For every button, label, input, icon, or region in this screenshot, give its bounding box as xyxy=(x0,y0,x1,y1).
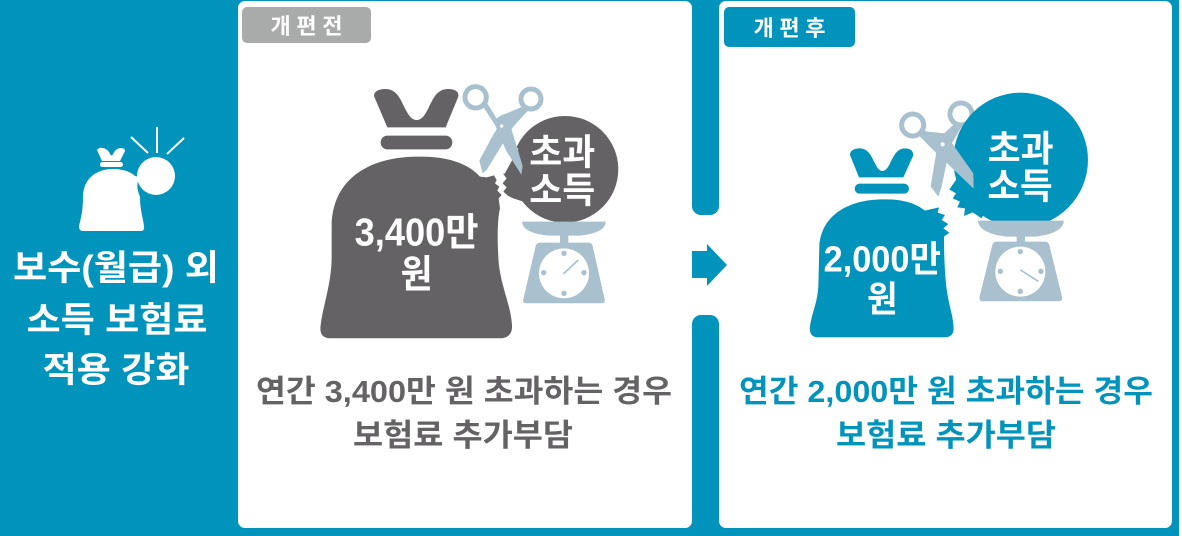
icon: scissors front blade xyxy=(483,103,523,175)
badge: after: 개 편 후 xyxy=(754,16,826,41)
text block: before description: 보험료 추가부담 xyxy=(353,418,573,453)
icon: scissors back blade and rings xyxy=(902,103,972,197)
panel: left sidebar xyxy=(13,127,219,390)
badge: before: 개 편 전 xyxy=(270,14,342,39)
text: excess income: 소득 xyxy=(529,169,595,210)
icon: scale xyxy=(522,222,606,303)
text block: before description xyxy=(256,374,672,453)
panel: before and after background xyxy=(238,1,1172,528)
text block: after description: 연간 2,000만 원 초과하는 경우 xyxy=(739,374,1153,409)
heading: sidebar title xyxy=(13,249,219,390)
text: excess income: 초과 xyxy=(988,128,1054,169)
badge: after xyxy=(724,7,855,47)
badge: before xyxy=(242,7,371,43)
icon: money bag 3,400만 원: 3,400만 xyxy=(355,211,479,254)
icon: scale xyxy=(978,221,1064,301)
text: excess income: 소득 xyxy=(987,166,1053,207)
illustration: before xyxy=(320,87,618,338)
text: excess income xyxy=(987,128,1054,207)
icon: scissors front blade xyxy=(918,128,974,189)
arrow: before to after xyxy=(692,244,727,286)
text block: before description: 연간 3,400만 원 초과하는 경우 xyxy=(256,374,672,409)
icon: money bag 2,000만 원: 원 xyxy=(867,279,898,320)
icon: money bag with coin xyxy=(79,127,184,231)
heading: sidebar title: 소득 보험료 xyxy=(26,301,208,340)
heading: sidebar title: 적용 강화 xyxy=(42,351,190,390)
icon: excess income coin xyxy=(949,93,1088,227)
text block: after description xyxy=(739,374,1153,453)
icon: excess income coin xyxy=(503,116,618,223)
icon: scissors back blade and rings xyxy=(465,87,541,173)
icon: money bag 3,400만 원 xyxy=(320,89,512,338)
icon: money bag 2,000만 원: 2,000만 xyxy=(824,238,941,279)
icon: money bag 3,400만 원: 원 xyxy=(401,253,433,296)
text: excess income: 초과 xyxy=(529,132,595,173)
icon: money bag 2,000만 원 xyxy=(810,148,954,337)
illustration: after xyxy=(810,93,1088,337)
heading: sidebar title: 보수(월급) 외 xyxy=(13,249,219,288)
text block: after description: 보험료 추가부담 xyxy=(836,418,1056,453)
text: excess income xyxy=(529,132,595,210)
